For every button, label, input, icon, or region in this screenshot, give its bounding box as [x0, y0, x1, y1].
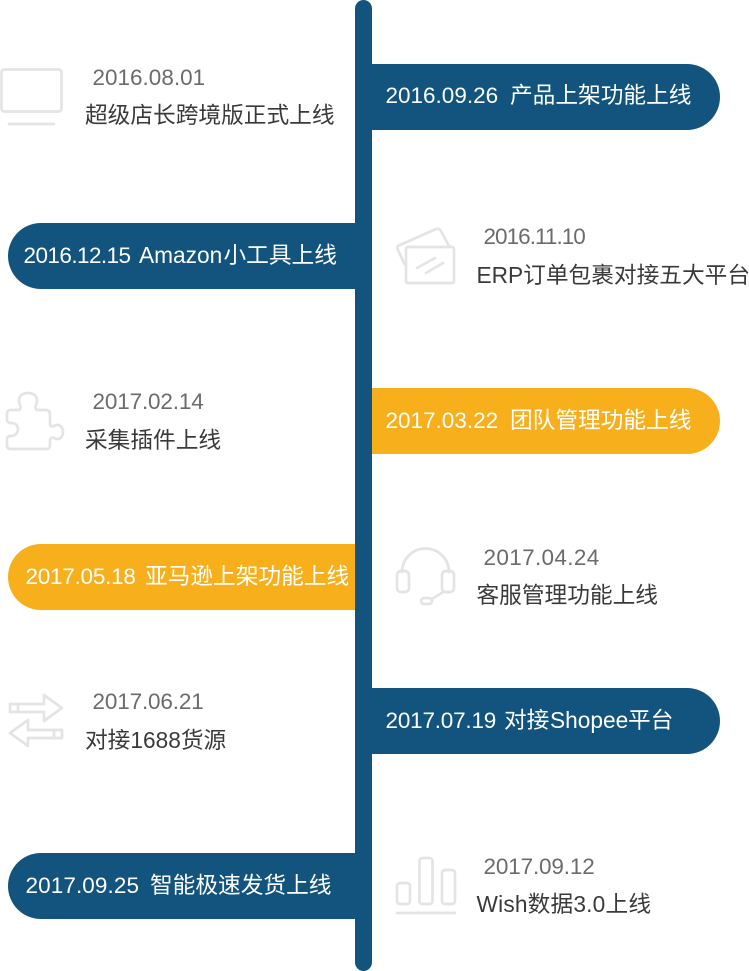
milestone: 2017.04.24	[397, 545, 658, 608]
milestone: 2016.08.01: 超级店长跨境版正式上线	[85, 102, 335, 128]
icon: cards	[397, 229, 454, 283]
milestone pill: 2017.07.19: 对接	[504, 707, 549, 733]
milestone pill: 2017.05.18: 亚马逊上架功能上线	[145, 563, 349, 589]
milestone: 2017.09.12: Wish数据3.0上线	[476, 891, 651, 917]
milestone: 2016.11.10: ERP订单包裹对接五大平台	[476, 262, 749, 288]
milestone: 2017.09.12	[397, 854, 651, 917]
milestone: 2017.02.14: 采集插件上线	[85, 427, 221, 453]
milestone pill: 2016.09.26: 2016.09.26	[386, 83, 498, 108]
icon: bar chart	[397, 858, 455, 913]
milestone pill: 2016.09.26	[372, 64, 720, 130]
milestone pill: 2017.09.25: 智能极速发货上线	[150, 872, 332, 898]
milestone: 2016.08.01	[2, 65, 335, 128]
milestone pill: 2017.03.22: 2017.03.22	[386, 408, 498, 433]
milestone pill: 2017.07.19: 2017.07.19	[386, 708, 496, 733]
milestone pill: 2017.05.18	[8, 544, 355, 610]
milestone pill: 2016.12.15: 2016.12.15	[24, 243, 131, 268]
icon: headset	[397, 548, 454, 604]
icon: exchange arrows	[10, 695, 62, 746]
icon: monitor	[2, 70, 62, 124]
milestone: 2016.11.10	[397, 224, 749, 288]
milestone: 2017.02.14	[7, 389, 221, 453]
milestone: 2017.02.14: 2017.02.14	[92, 389, 204, 414]
milestone pill: 2016.12.15: 小工具上线	[224, 242, 337, 268]
milestone pill: 2017.03.22: 团队管理功能上线	[510, 407, 692, 433]
milestone pill: 2017.09.25	[8, 853, 355, 919]
icon: puzzle piece	[7, 393, 63, 449]
milestone pill: 2016.09.26: 产品上架功能上线	[510, 82, 692, 108]
milestone: 2017.06.21: 2017.06.21	[92, 689, 204, 714]
milestone: 2017.06.21	[10, 689, 226, 753]
milestone pill: 2017.03.22	[372, 388, 720, 454]
milestone pill: 2017.09.25: 2017.09.25	[26, 873, 139, 898]
milestone pill: 2016.12.15	[8, 223, 355, 289]
milestone pill: 2016.12.15: Amazon	[139, 242, 222, 268]
milestone pill: 2017.07.19: Shopee	[550, 707, 628, 733]
milestone: 2017.09.12: 2017.09.12	[484, 854, 595, 879]
milestone: 2017.06.21: 对接1688货源	[85, 727, 226, 753]
milestone: 2017.04.24: 客服管理功能上线	[476, 582, 658, 608]
milestone: 2016.11.10: 2016.11.10	[484, 224, 585, 249]
milestone: 2016.08.01: 2016.08.01	[92, 65, 205, 90]
milestone pill: 2017.07.19: 平台	[628, 707, 673, 733]
milestone pill: 2017.07.19	[372, 688, 720, 754]
milestone: 2017.04.24: 2017.04.24	[484, 545, 600, 570]
milestone pill: 2017.05.18: 2017.05.18	[26, 564, 136, 589]
timeline spine	[355, 0, 372, 971]
